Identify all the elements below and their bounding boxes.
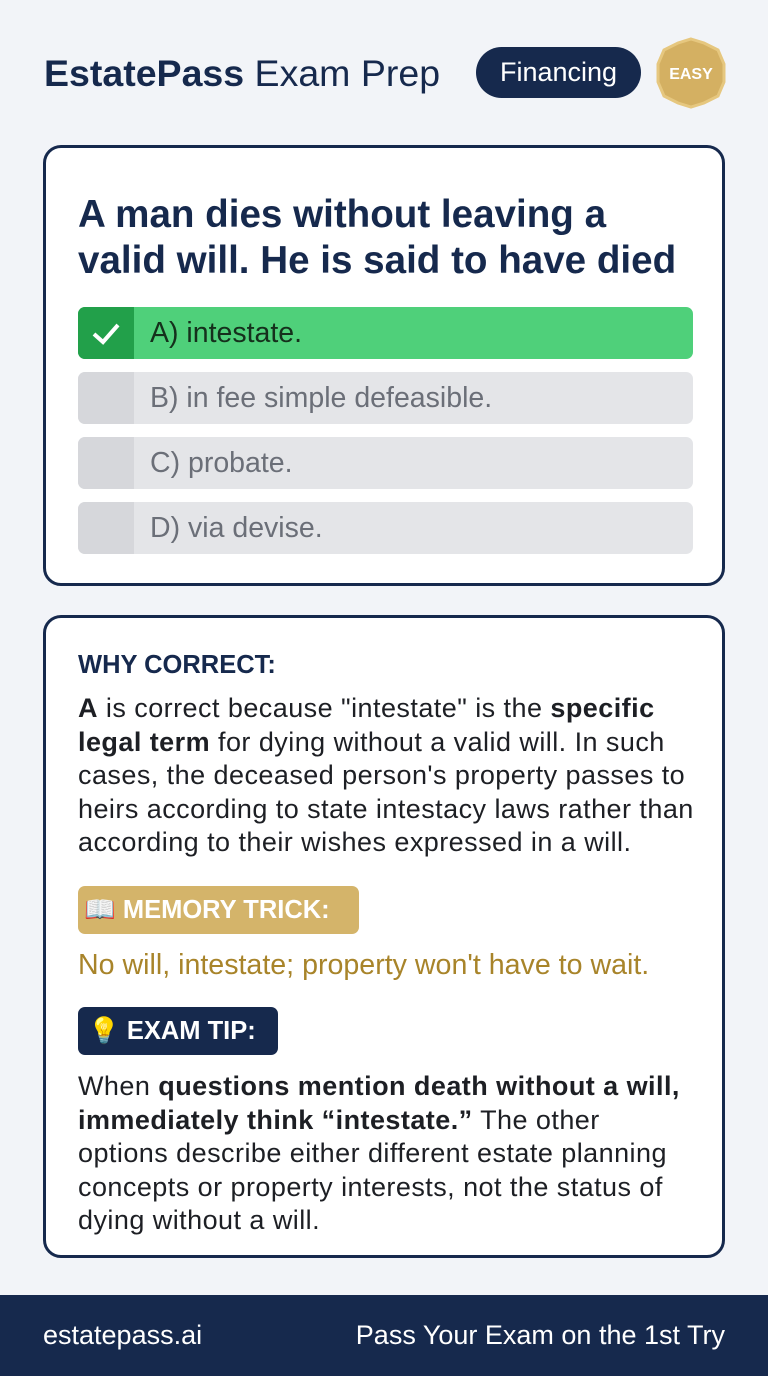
- footer url: estatepass.ai: [43, 1320, 202, 1350]
- heading: why correct: WHY CORRECT:: [78, 651, 276, 679]
- footer tagline: Pass Your Exam on the 1st Try: [356, 1320, 725, 1350]
- memory trick badge: 📖 MEMORY TRICK:: [84, 896, 330, 924]
- exam tip text: When questions mention death without a will,: [78, 1071, 680, 1101]
- exam tip text: concepts or property interests, not the status of: [78, 1172, 663, 1202]
- memory trick badge: [78, 886, 359, 934]
- exam tip badge: [78, 1007, 278, 1055]
- question text: valid will. He is said to have died: [78, 239, 676, 282]
- option B: B) in fee simple defeasible.: [150, 382, 492, 414]
- pill: Financing: Financing: [500, 57, 617, 87]
- footer: [0, 1295, 768, 1376]
- explanation text: according to their wishes expressed in a will.: [78, 827, 631, 857]
- option A correct: A) intestate.: [150, 317, 302, 349]
- option D: D) via devise.: [150, 512, 323, 544]
- panel: question: [43, 145, 725, 586]
- exam tip text: [78, 1071, 680, 1235]
- explanation text: cases, the deceased person's property passes to: [78, 760, 685, 790]
- explanation text: A is correct because "intestate" is the specific: [78, 693, 655, 723]
- explanation text: [78, 693, 694, 857]
- question text: A man dies without leaving a: [78, 193, 606, 236]
- exam tip text: dying without a will.: [78, 1205, 320, 1235]
- memory trick text: No will, intestate; property won't have to wait.: [78, 949, 649, 981]
- option B: [78, 372, 693, 424]
- badge: easy: EASY: [669, 66, 713, 83]
- option C: C) probate.: [150, 447, 293, 479]
- question text: [78, 193, 676, 282]
- explanation text: legal term for dying without a valid will. In such: [78, 726, 665, 756]
- exam tip text: options describe either different estate planning: [78, 1138, 667, 1168]
- option A correct: [78, 307, 693, 359]
- badge: easy: [656, 37, 726, 109]
- title: EstatePass Exam Prep: [44, 52, 440, 94]
- explanation text: heirs according to state intestacy laws rather than: [78, 794, 694, 824]
- exam tip text: immediately think “intestate.” The other: [78, 1104, 600, 1134]
- pill: Financing: [476, 47, 641, 98]
- option D: [78, 502, 693, 554]
- panel: explanation: [43, 615, 725, 1258]
- option C: [78, 437, 693, 489]
- exam tip badge: 💡 EXAM TIP:: [88, 1017, 256, 1045]
